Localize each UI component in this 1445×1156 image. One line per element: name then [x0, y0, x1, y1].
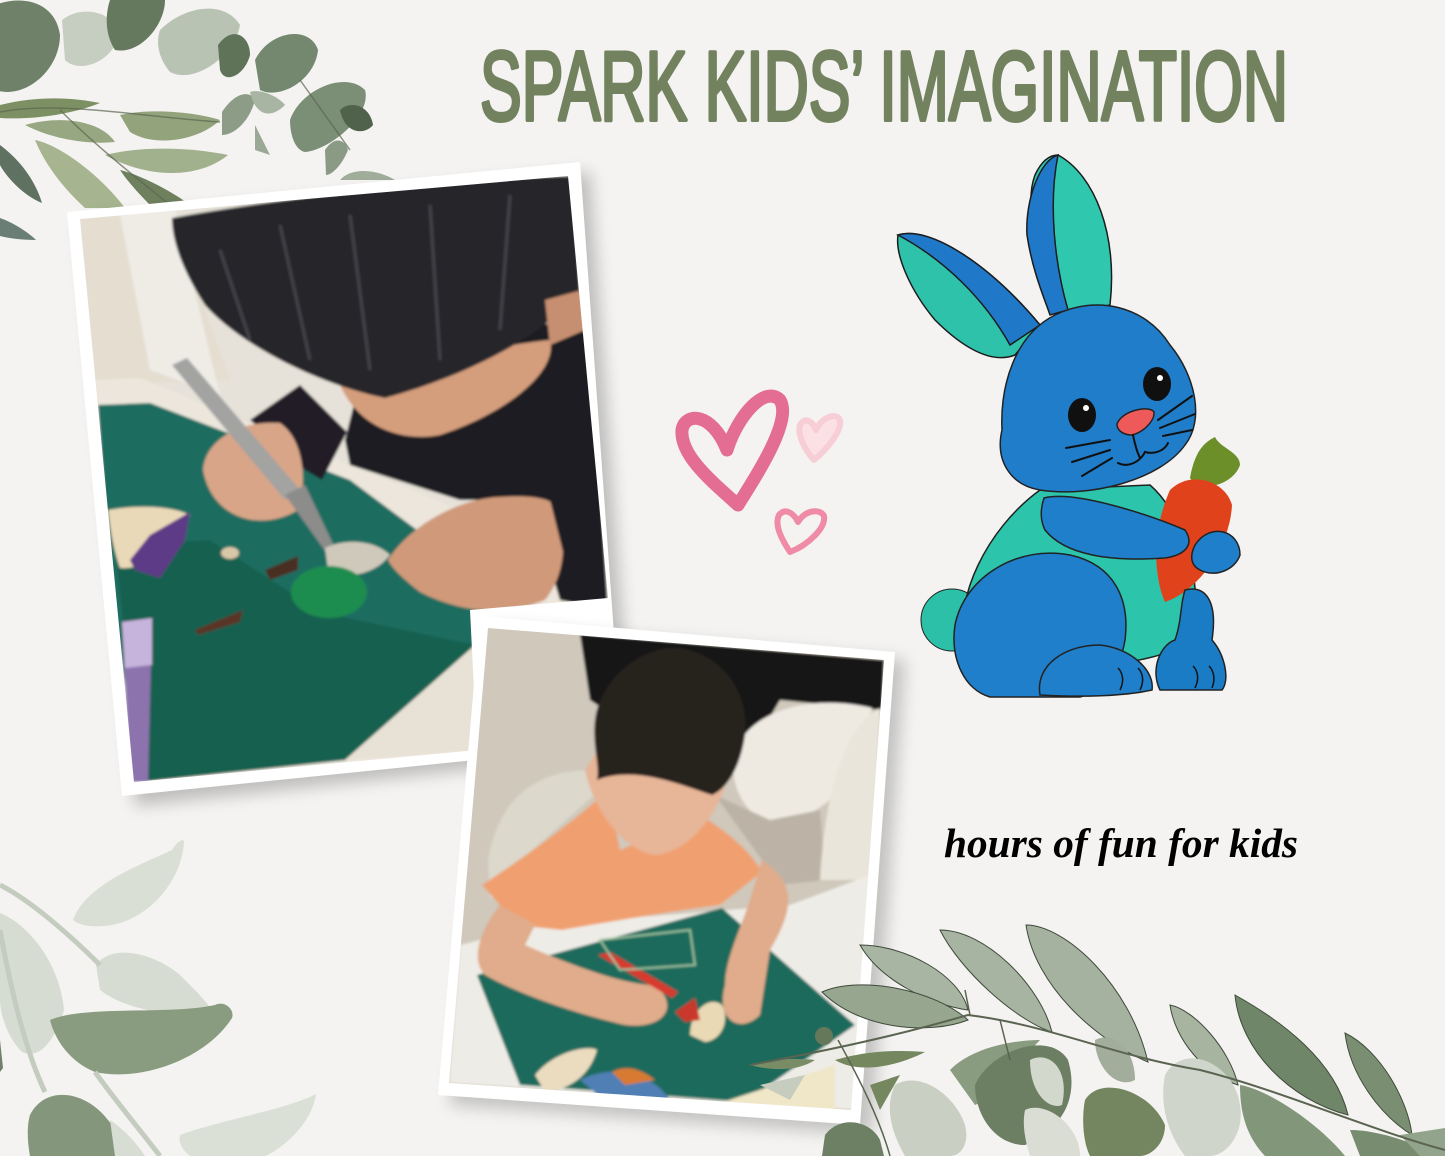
bunny head — [1000, 305, 1196, 492]
carrot — [1156, 437, 1240, 602]
bunny toe lines — [1118, 666, 1214, 690]
caption: hours of fun for kids — [944, 820, 1298, 866]
icon: pink hearts — [682, 396, 840, 552]
bunny torso — [963, 485, 1196, 666]
photo: child colouring a wooden turtle with a silver marker — [67, 162, 632, 806]
bunny face — [1066, 367, 1195, 476]
photo: child drawing on a green cutting mat — [438, 616, 905, 1135]
illustration: blue wooden bunny holding a carrot — [898, 155, 1240, 697]
bunny haunch — [954, 553, 1126, 697]
foliage: bottom-right eucalyptus garland — [750, 925, 1445, 1156]
bunny paw — [1192, 531, 1240, 573]
bunny arm — [1041, 496, 1189, 559]
bunny tail — [921, 589, 983, 651]
bunny front foot — [1039, 645, 1152, 696]
foliage: top-left eucalyptus — [0, 0, 395, 240]
bunny ears — [898, 155, 1112, 358]
foliage: bottom-left pale leaves — [0, 840, 316, 1156]
bunny far leg — [1156, 589, 1226, 690]
